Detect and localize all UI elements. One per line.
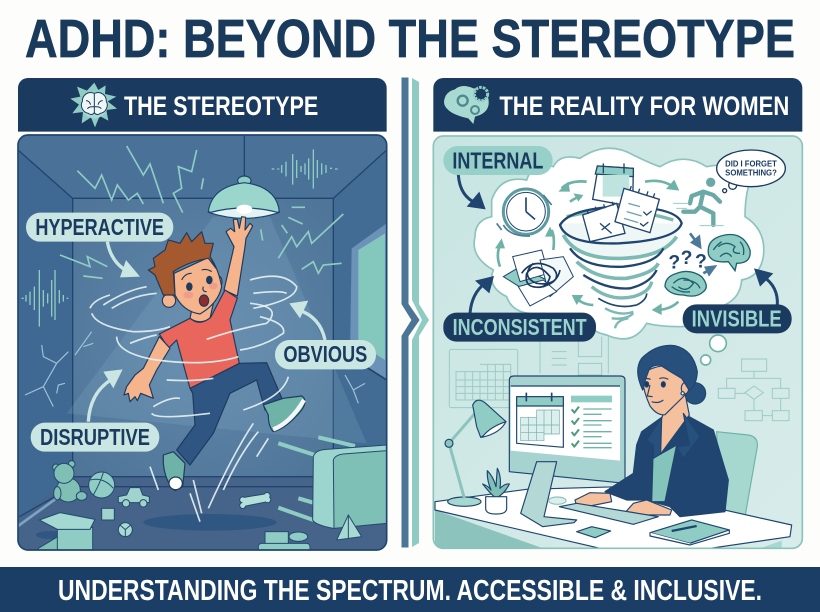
hair bbox=[148, 232, 216, 295]
speech text bbox=[725, 159, 777, 178]
teddy bear bbox=[53, 461, 87, 502]
cycle arrows bbox=[495, 180, 717, 315]
ears bbox=[162, 294, 176, 307]
question marks: ? bbox=[681, 248, 692, 269]
blouse bbox=[652, 445, 677, 502]
arrow: internal bbox=[458, 175, 486, 209]
lower arm bbox=[124, 337, 170, 402]
small block bbox=[102, 508, 114, 520]
divider chevron bbox=[402, 78, 429, 547]
stereotype header bbox=[18, 78, 387, 132]
left shoe bbox=[163, 452, 185, 491]
stereotype heading: THE STEREOTYPE bbox=[124, 91, 318, 121]
clock bbox=[497, 189, 552, 236]
label: invisible: INVISIBLE bbox=[692, 306, 782, 332]
boy bbox=[124, 217, 305, 491]
label: obvious: OBVIOUS bbox=[283, 341, 367, 367]
arrow: inconsistent bbox=[470, 276, 494, 313]
scene: woman at desk bbox=[433, 136, 802, 548]
wall cracks bbox=[25, 332, 365, 407]
bottom blocks bbox=[258, 532, 310, 552]
ball bbox=[89, 472, 115, 498]
reality header bbox=[433, 78, 802, 132]
neck and chest bbox=[653, 393, 689, 454]
woman bbox=[575, 345, 728, 517]
toys and furniture bbox=[36, 437, 387, 553]
panel: the stereotype bbox=[18, 78, 387, 553]
arrow: obvious bbox=[289, 301, 325, 340]
icon: brain with gears bbox=[444, 86, 489, 124]
face bbox=[174, 257, 222, 314]
label: inconsistent: INCONSISTENT bbox=[453, 314, 587, 340]
thought bubbles bbox=[701, 335, 726, 365]
chair bbox=[717, 432, 757, 517]
runner bbox=[673, 178, 723, 226]
desk bbox=[435, 487, 792, 548]
hair bun bbox=[684, 383, 706, 404]
door bbox=[350, 223, 387, 380]
speech bubble bbox=[717, 150, 785, 193]
panel: the reality for women bbox=[433, 78, 802, 548]
arrow: invisible bbox=[754, 268, 777, 305]
monitor stand bbox=[521, 462, 577, 527]
icon: brain starburst bbox=[70, 83, 117, 127]
hands bbox=[575, 493, 612, 507]
shirt bbox=[159, 290, 239, 388]
calendar top bbox=[593, 163, 633, 207]
light cone bbox=[67, 217, 367, 443]
neck bbox=[190, 303, 213, 322]
tangled papers bbox=[503, 250, 573, 306]
pyramid bbox=[337, 515, 362, 540]
right shoe bbox=[263, 396, 305, 432]
calendar on screen bbox=[517, 393, 563, 447]
motion swirls behind boy bbox=[90, 276, 297, 332]
phone bbox=[577, 527, 611, 538]
question marks: ? bbox=[668, 252, 680, 273]
raised arm bbox=[224, 217, 253, 296]
overturned chair bbox=[278, 437, 387, 528]
motion swirls in front bbox=[117, 303, 288, 522]
keyboard bbox=[559, 503, 658, 524]
label: hyperactive: HYPERACTIVE bbox=[35, 214, 164, 240]
monitor bbox=[509, 376, 625, 483]
brain small bbox=[665, 271, 706, 296]
plant bbox=[483, 468, 509, 514]
thought cloud bbox=[474, 148, 764, 339]
floor shadow bbox=[143, 514, 277, 531]
lamp bbox=[445, 400, 506, 506]
speech text: DID I FORGET bbox=[725, 159, 777, 169]
mouse bbox=[549, 497, 566, 504]
label: disruptive: DISRUPTIVE bbox=[40, 424, 150, 450]
lightning bolts bbox=[60, 146, 343, 278]
question marks: ? bbox=[695, 251, 707, 272]
question marks bbox=[668, 248, 707, 273]
toy car bbox=[118, 488, 149, 507]
bone bbox=[240, 493, 271, 508]
label: internal: INTERNAL bbox=[452, 147, 543, 173]
notebook bbox=[650, 520, 729, 545]
arrow: hyperactive bbox=[107, 242, 140, 277]
tornado bbox=[560, 207, 682, 328]
background documents bbox=[449, 337, 789, 421]
lapels bbox=[647, 413, 700, 458]
sound waves bbox=[22, 149, 338, 327]
desk scene bbox=[435, 335, 792, 548]
hair bbox=[638, 345, 697, 391]
ceiling lamp bbox=[208, 176, 279, 218]
brain large bbox=[708, 234, 750, 271]
face bbox=[642, 366, 686, 415]
small ball bbox=[118, 523, 132, 537]
arrow: disruptive bbox=[88, 369, 123, 422]
task list bbox=[571, 396, 612, 448]
building blocks left bbox=[36, 513, 95, 553]
jacket bbox=[605, 413, 728, 517]
footer banner bbox=[0, 567, 820, 612]
scene: chaotic room bbox=[18, 135, 387, 553]
jeans bbox=[177, 363, 284, 465]
checklist pages bbox=[583, 186, 659, 242]
speech text: SOMETHING? bbox=[725, 168, 777, 178]
